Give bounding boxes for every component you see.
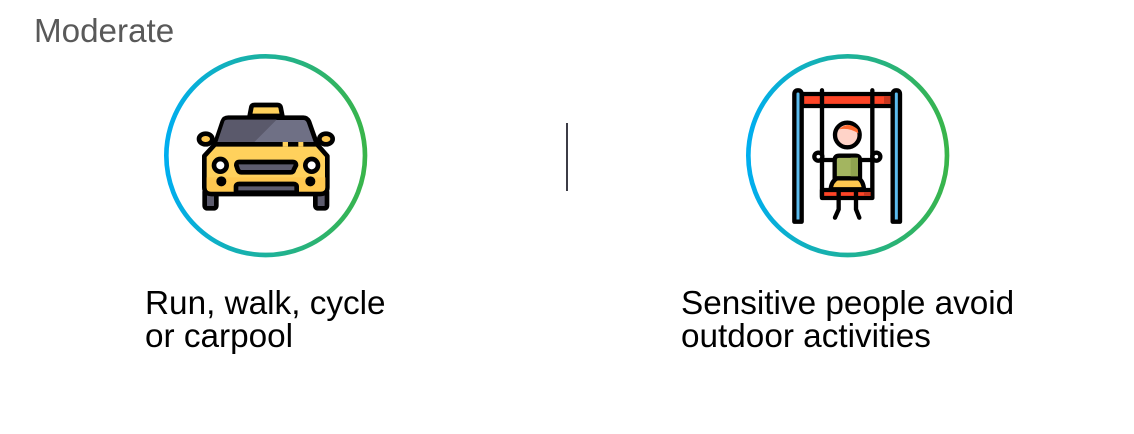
- caption: swing: [681, 285, 1014, 355]
- caption: swing: Sensitive people avoid: [681, 285, 1014, 322]
- icon: child on swing in gradient ring: [746, 54, 950, 258]
- caption: taxi: [145, 285, 386, 355]
- caption: swing: outdoor activities: [681, 318, 931, 355]
- heading: Moderate: Moderate: [34, 13, 174, 50]
- caption: taxi: or carpool: [145, 318, 293, 355]
- divider line: [566, 123, 568, 191]
- caption: taxi: Run, walk, cycle: [145, 285, 386, 322]
- icon: taxi in gradient ring: [164, 54, 368, 258]
